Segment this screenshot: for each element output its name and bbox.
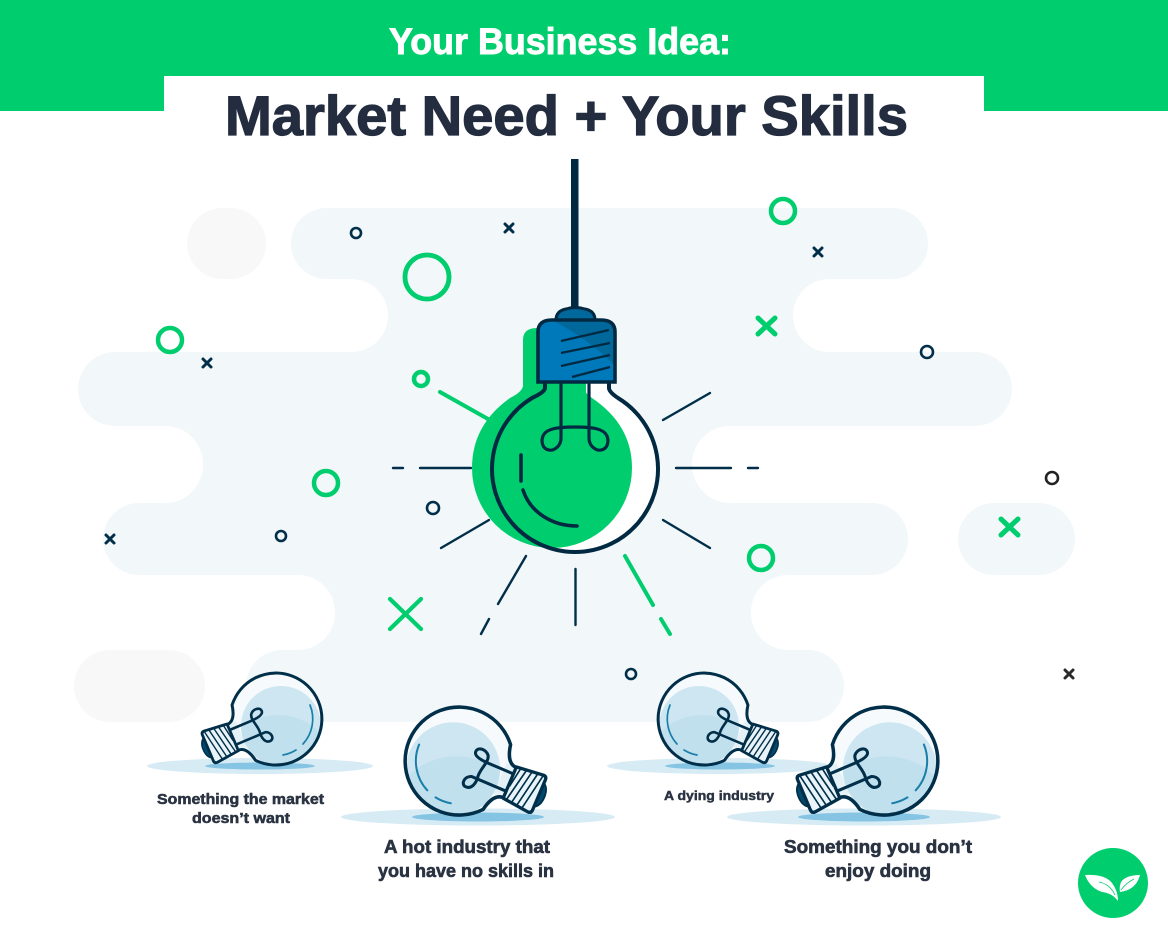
background cloud shapes	[60, 208, 1075, 722]
fallen bulb: dying industry	[644, 659, 795, 803]
caption: hot industry	[378, 837, 554, 881]
title: market need + your skills: Market Need + Your Skills	[225, 84, 908, 147]
caption: hot industry: you have no skills in	[378, 861, 554, 881]
fallen bulb: market	[185, 659, 336, 803]
ground shadows of small bulbs	[147, 758, 1001, 826]
bulb cord	[571, 159, 578, 309]
heading: your business idea: Your Business Idea:	[389, 21, 731, 62]
blue socket	[538, 320, 615, 382]
decorative dark rings	[276, 228, 1058, 679]
caption: something the market doesn't want: doesn’t want	[192, 810, 290, 827]
socket cap	[556, 308, 595, 320]
bulb outline	[492, 380, 658, 552]
green glow offset shape	[472, 328, 632, 548]
decorative green crosses	[390, 318, 1018, 629]
decorative green rings	[158, 199, 795, 570]
fallen bulb: hot industry	[388, 690, 565, 860]
fallen bulb: not enjoyable	[778, 690, 955, 860]
light rays around main bulb	[393, 392, 758, 634]
caption: something you don't enjoy doing: Something you don’t	[784, 837, 972, 857]
header band	[0, 0, 1168, 116]
glass highlights	[521, 455, 577, 526]
caption: something you don't enjoy doing: enjoy doing	[825, 861, 931, 881]
caption: something the market doesn't want	[157, 791, 324, 827]
bulb white glass	[492, 380, 658, 552]
caption: something the market doesn't want: Something the market	[157, 791, 324, 808]
filament	[542, 382, 608, 450]
decorative dark crosses	[106, 224, 1073, 678]
hanging light bulb	[472, 159, 658, 552]
caption: dying industry: A dying industry	[664, 788, 775, 803]
caption: something you don't enjoy doing	[784, 837, 972, 881]
logo: leaf badge	[1078, 848, 1148, 918]
caption: hot industry: A hot industry that	[384, 837, 550, 857]
